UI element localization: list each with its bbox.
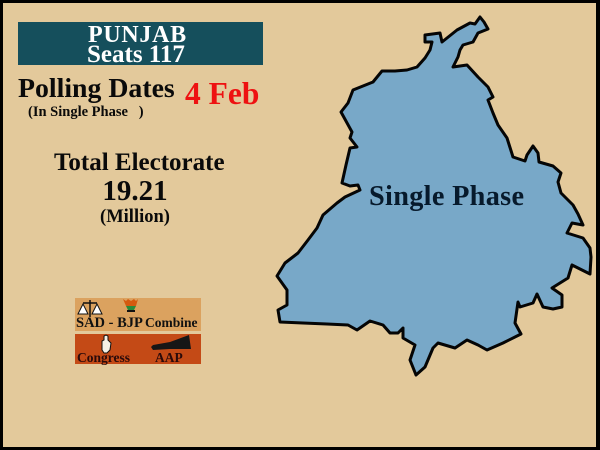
polling phase note: (In Single Phase ) xyxy=(28,104,144,120)
legend label: AAP: AAP xyxy=(155,350,183,365)
icon: hand xyxy=(102,335,111,353)
title banner xyxy=(18,22,263,65)
electorate value: 19.21 xyxy=(102,175,168,207)
legend label: SAD-BJP: SAD - BJP xyxy=(76,315,143,331)
icon: lotus xyxy=(123,299,138,312)
legend label: Combine: Combine xyxy=(145,315,198,330)
title: Punjab: PUNJAB xyxy=(88,22,187,48)
map label: Single Phase xyxy=(369,181,524,212)
electorate label: Total Electorate xyxy=(54,149,225,176)
polling dates heading: Polling Dates xyxy=(18,73,175,104)
legend: SAD-BJP panel xyxy=(75,298,201,331)
title: seats: Seats 117 xyxy=(87,41,185,68)
electorate unit: (Million) xyxy=(100,207,170,227)
legend label: Congress: Congress xyxy=(77,350,130,365)
icon: scales xyxy=(78,300,102,317)
polling date value: 4 Feb xyxy=(185,76,259,111)
legend: Congress and AAP panel xyxy=(75,334,201,364)
icon: broom xyxy=(151,335,191,350)
